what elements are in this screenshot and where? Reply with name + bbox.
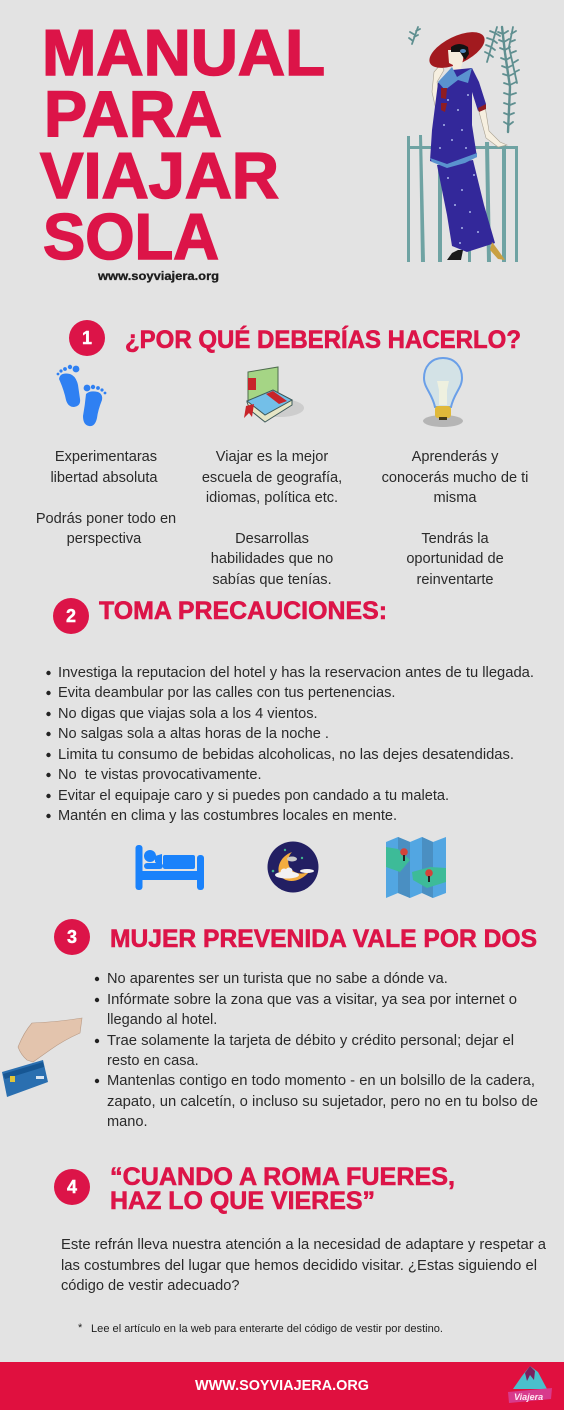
precautions list: Mantén en clima y las costumbres locales en mente. — [58, 808, 397, 824]
collar — [438, 67, 472, 90]
section 4 number: 4 — [67, 1177, 77, 1197]
icon: hand holding credit card — [2, 1018, 82, 1097]
section 4 heading: HAZ LO QUE VIERES” — [110, 1187, 375, 1215]
section 2 number — [53, 598, 89, 634]
fence — [407, 135, 518, 262]
section 3 number: 3 — [67, 927, 77, 947]
section 4 number — [54, 1169, 90, 1205]
column 2: escuela de geografía, — [202, 470, 342, 486]
section 1 number — [69, 320, 105, 356]
icon: footprints — [57, 365, 106, 426]
paragraph: Este refrán lleva nuestra atención a la necesidad de adaptare y respetar a — [61, 1237, 547, 1253]
icon: light bulb — [423, 358, 463, 427]
website address: www.soyviajera.org — [97, 269, 219, 283]
section 2 heading: TOMA PRECAUCIONES: — [99, 597, 387, 625]
title: PARA — [44, 78, 222, 150]
footnote: Lee el artículo en la web para enterarte del código de vestir por destino. — [91, 1323, 443, 1335]
footer website: WWW.SOYVIAJERA.ORG — [195, 1377, 369, 1394]
dress dots — [439, 94, 479, 244]
tips list: resto en casa. — [107, 1053, 199, 1069]
red sash — [441, 88, 447, 112]
hair — [451, 44, 469, 60]
willow branches — [409, 27, 519, 132]
column 2 — [202, 449, 342, 588]
footnote: * — [78, 1322, 83, 1334]
column 2: idiomas, política etc. — [206, 490, 338, 506]
footer band — [0, 1362, 564, 1410]
logo: mountain badge: Viajera — [514, 1392, 543, 1402]
section 3 number — [54, 919, 90, 955]
dress overskirt trim — [430, 153, 477, 168]
tips list: Trae solamente la tarjeta de débito y crédito personal; dejar el — [107, 1033, 514, 1049]
precautions list: Investiga la reputacion del hotel y has la reservacion antes de tu llegada. — [58, 665, 534, 681]
section 2 number: 2 — [66, 606, 76, 626]
tips list: zapato, un calcetín, o incluso su sujetador, pero no en tu bolso de — [107, 1094, 538, 1110]
illustration: woman at fence — [407, 25, 519, 262]
column 2: habilidades que no — [211, 551, 333, 567]
section 1 number: 1 — [82, 328, 92, 348]
text columns: benefits — [36, 449, 528, 588]
paragraph: código de vestir adecuado? — [61, 1278, 240, 1294]
precautions list: No te vistas provocativamente. — [58, 767, 262, 783]
tips list: No aparentes ser un turista que no sabe a dónde va. — [107, 971, 448, 987]
shoes — [447, 250, 463, 260]
title: VIAJAR — [40, 139, 279, 212]
precautions list: No digas que viajas sola a los 4 vientos. — [58, 706, 318, 722]
precautions list: Evitar el equipaje caro y si puedes pon candado a tu maleta. — [58, 788, 449, 804]
precautions list: No salgas sola a altas horas de la noche . — [58, 726, 329, 742]
hair ribbon — [460, 49, 466, 53]
tips list: Mantenlas contigo en todo momento - en un bolsillo de la cadera, — [107, 1073, 535, 1089]
paragraph — [61, 1237, 547, 1294]
dress — [430, 68, 486, 167]
precautions list: Limita tu consumo de bebidas alcoholicas, no las dejes desatendidas. — [58, 747, 514, 763]
icon: map — [386, 837, 446, 898]
column 3: oportunidad de — [406, 551, 504, 567]
neck and face — [448, 50, 464, 76]
precautions list: Evita deambular por las calles con tus pertenencias. — [58, 685, 395, 701]
column 3: misma — [434, 490, 477, 506]
column 3: reinventarte — [416, 572, 494, 588]
tips list — [95, 971, 538, 1130]
title — [40, 16, 325, 273]
column 2: sabías que tenías. — [212, 572, 332, 588]
logo: mountain badge — [508, 1366, 552, 1403]
icon: moon badge — [268, 842, 318, 892]
arm and hand — [478, 106, 507, 147]
column 3: Tendrás la — [421, 531, 490, 547]
column 3: conocerás mucho de ti — [382, 470, 528, 486]
section 1 heading: ¿POR QUÉ DEBERÍAS HACERLO? — [125, 325, 521, 354]
icon: bed — [136, 845, 204, 890]
column 3 — [382, 449, 528, 588]
section 4 heading: “CUANDO A ROMA FUERES, — [110, 1163, 455, 1191]
tips list: llegando al hotel. — [107, 1012, 217, 1028]
tips list: mano. — [107, 1114, 148, 1130]
column 1: Podrás poner todo en — [36, 511, 176, 527]
column 3: Aprenderás y — [412, 449, 499, 465]
column 1: Experimentaras — [55, 449, 157, 465]
column 2: Viajar es la mejor — [216, 449, 328, 465]
title: SOLA — [43, 200, 219, 273]
precautions list — [46, 665, 534, 824]
section 4 heading — [110, 1163, 455, 1215]
column 2: Desarrollas — [235, 531, 309, 547]
column 1: perspectiva — [67, 531, 142, 547]
paragraph: las costumbres del lugar que hemos decidido visitar. ¿Estas siguiendo el — [61, 1258, 537, 1274]
section 3 heading: MUJER PREVENIDA VALE POR DOS — [110, 925, 537, 953]
hat — [424, 25, 490, 75]
tips list: Infórmate sobre la zona que vas a visitar, ya sea por internet o — [107, 992, 517, 1008]
title: MANUAL — [42, 16, 325, 89]
column 1 — [36, 449, 176, 547]
column 1: libertad absoluta — [50, 470, 158, 486]
icon: books — [244, 367, 304, 422]
